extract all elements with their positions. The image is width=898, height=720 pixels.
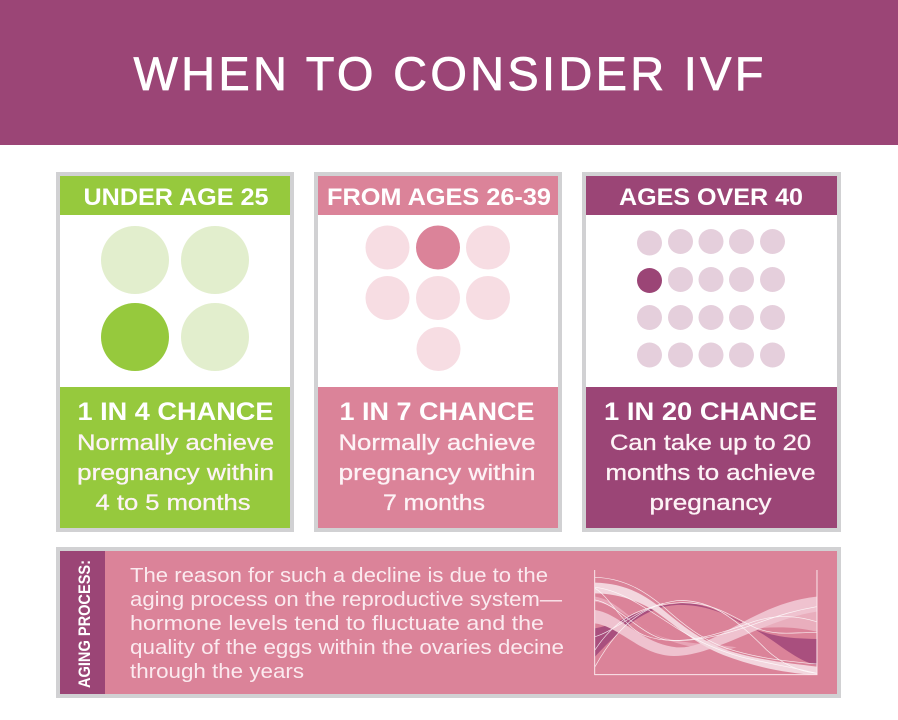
panel text: 1 IN 20 CHANCE xyxy=(604,398,817,426)
panel text: 1 IN 7 CHANCE xyxy=(340,398,534,426)
panel text: 4 to 5 months xyxy=(96,490,250,515)
aging process text: hormone levels tend to fluctuate and the xyxy=(130,612,544,635)
icon: 1 in 4 circles xyxy=(101,226,249,371)
panel text: months to achieve xyxy=(606,460,816,485)
panel header xyxy=(318,176,558,215)
aging process text: aging process on the reproductive system— xyxy=(130,588,563,611)
panel text: Normally achieve xyxy=(77,430,274,455)
side label xyxy=(60,551,105,694)
panel text xyxy=(318,387,558,528)
side label: AGING PROCESS: xyxy=(76,560,94,688)
panel text: Normally achieve xyxy=(338,430,536,455)
panel text: pregnancy xyxy=(650,490,772,515)
panel header: FROM AGES 26-39 xyxy=(327,184,551,211)
panel text: Can take up to 20 xyxy=(610,430,811,455)
panel text: 1 IN 4 CHANCE xyxy=(78,398,274,426)
aging process text: through the years xyxy=(130,660,304,683)
panel: under age 25 xyxy=(56,172,294,532)
aging process text: quality of the eggs within the ovaries decine xyxy=(130,636,564,659)
aging process text xyxy=(130,564,564,683)
panel text: pregnancy within xyxy=(77,460,274,485)
chart: fluctuating hormone bands xyxy=(595,570,817,675)
panel: ages over 40 xyxy=(582,172,841,532)
aging process text: The reason for such a decline is due to the xyxy=(130,564,548,587)
panel text xyxy=(586,387,837,528)
icon: 1 in 7 circles xyxy=(366,226,510,371)
icon: 1 in 20 circles xyxy=(637,229,785,368)
title banner xyxy=(0,0,898,145)
panel header: AGES OVER 40 xyxy=(619,184,803,211)
panel header: UNDER AGE 25 xyxy=(84,184,268,211)
panel header xyxy=(586,176,837,215)
chart axes xyxy=(595,570,817,675)
panel text xyxy=(60,387,290,528)
title: WHEN TO CONSIDER IVF xyxy=(134,47,764,100)
panel header xyxy=(60,176,290,215)
panel: aging process xyxy=(56,547,841,698)
panel: ages 26-39 xyxy=(314,172,562,532)
panel text: pregnancy within xyxy=(338,460,536,485)
panel text: 7 months xyxy=(383,490,485,515)
